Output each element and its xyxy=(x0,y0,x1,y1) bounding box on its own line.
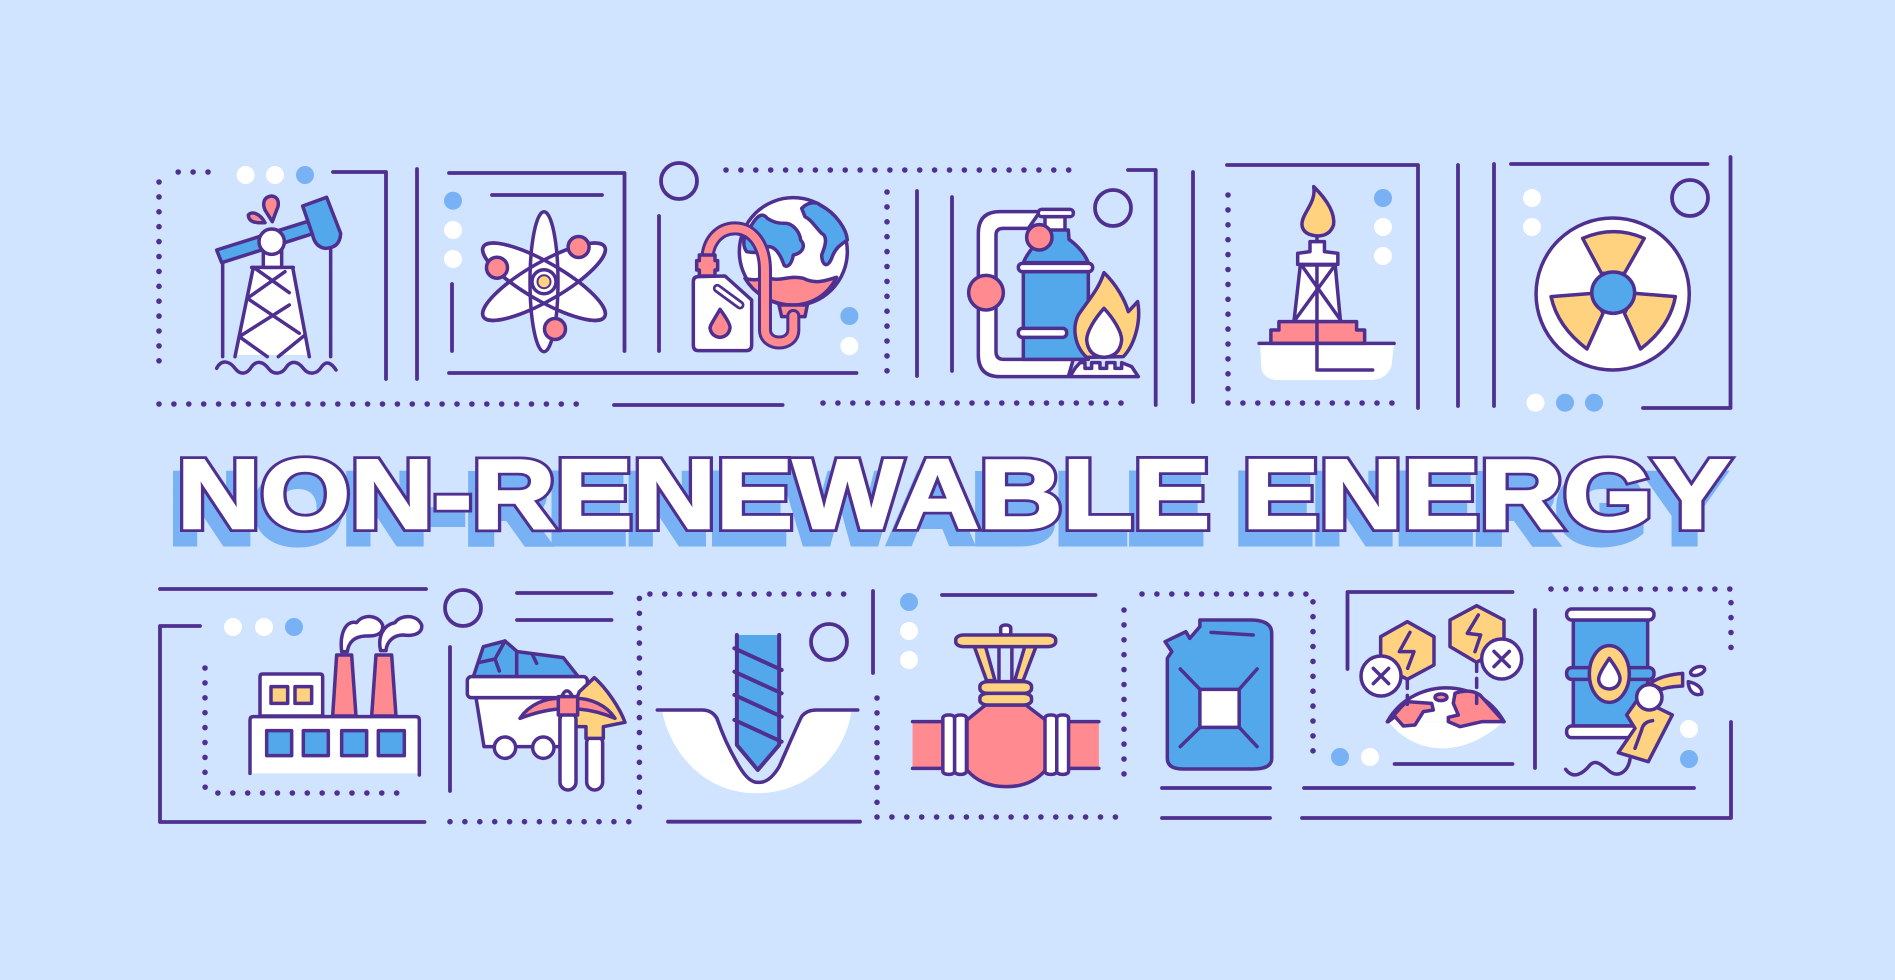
icon: pipeline valve xyxy=(913,625,1099,787)
decorative frame: bottom row lines, dots and rings xyxy=(160,589,1731,822)
icon: drill bit in ground xyxy=(657,635,858,793)
icon: globe and fuel can with tube xyxy=(693,198,847,351)
icon: offshore gas rig with flame xyxy=(1259,187,1394,380)
icon: jerry can xyxy=(1165,620,1272,769)
icon: radiation symbol xyxy=(1536,218,1689,370)
heading: title with drop shadow: NON-RENEWABLE ENERGY xyxy=(177,439,1730,549)
icon: energy warnings over globe xyxy=(1361,606,1522,748)
icon: factory xyxy=(250,617,422,775)
heading: title with drop shadow: NON-RENEWABLE ENERGY xyxy=(170,453,1723,563)
icon: oil pump jack xyxy=(217,196,341,373)
icon: gas cylinder with burner flame xyxy=(969,209,1139,377)
icon: coal cart with pickaxe and shovel xyxy=(467,641,625,790)
icon: oil barrel with fuel nozzle xyxy=(1566,609,1706,775)
icon: atom xyxy=(474,212,614,352)
decorative frame: top row lines, dots and rings xyxy=(159,157,1730,412)
heading: title with drop shadow: NON-RENEWABLE ENERGY xyxy=(177,439,1730,549)
